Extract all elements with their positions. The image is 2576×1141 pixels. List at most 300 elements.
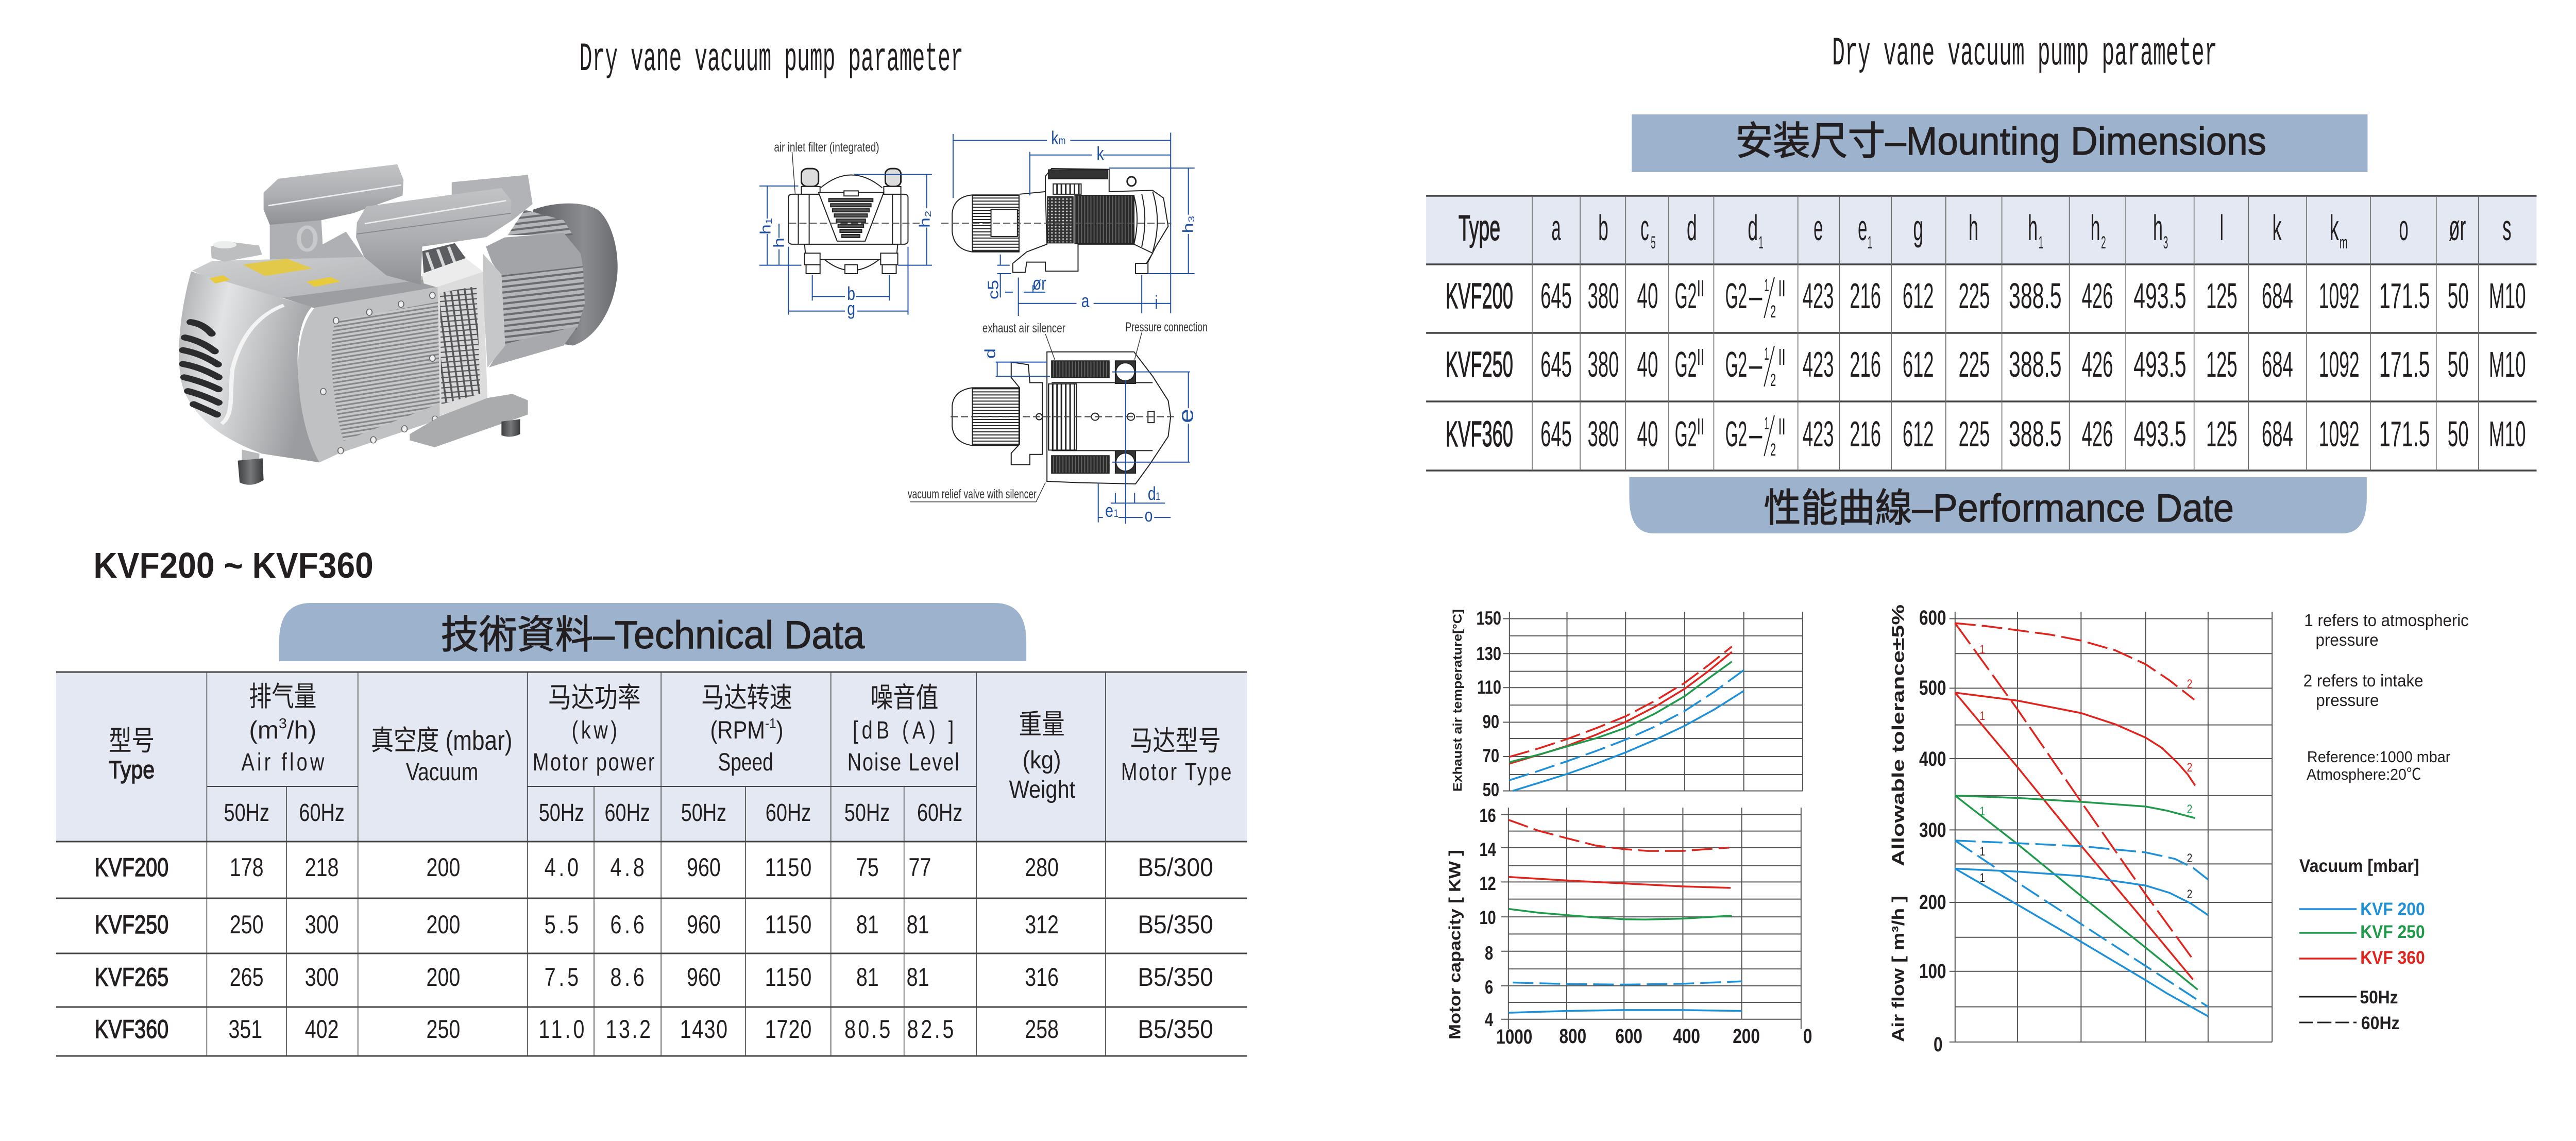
dimension letters: k xyxy=(1051,128,1059,148)
x axis values: 400 xyxy=(1673,1024,1700,1048)
row: KVF360: 388.5 xyxy=(2009,414,2062,455)
y axis values: 500 xyxy=(1919,676,1946,699)
table header text: Motor power xyxy=(533,749,655,776)
dimension drawing xyxy=(759,132,1195,524)
row: KVF250: 612 xyxy=(1903,345,1934,385)
table header text: Type xyxy=(1459,208,1500,248)
table header text: 噪音值 xyxy=(871,682,938,713)
legend: KVF 200: KVF 200 xyxy=(2360,899,2425,919)
row: KVF250: 216 xyxy=(1850,345,1881,385)
row: KVF360: G2 xyxy=(1725,414,1747,455)
row: KVF200: 426 xyxy=(2082,276,2113,316)
table header text: [dB (A) ] xyxy=(853,717,954,744)
row: KVF265: 81 xyxy=(907,962,929,992)
heading tab: technical data xyxy=(279,603,1026,661)
model range heading: KVF200 ~ KVF360 xyxy=(93,546,374,586)
row: KVF250: 6.6 xyxy=(611,910,645,939)
rear foot xyxy=(501,419,520,437)
dimension letters: m xyxy=(1059,135,1065,147)
row: KVF360: 40 xyxy=(1637,414,1658,455)
row: KVF360: – xyxy=(1749,414,1762,455)
row: KVF360: 2 xyxy=(1770,440,1776,460)
y axis values: 110 xyxy=(1477,677,1501,698)
dimension letters: h₂ xyxy=(917,210,933,228)
note 1: pressure xyxy=(2315,631,2379,650)
row: KVF360: 351 xyxy=(228,1014,262,1044)
bottom view xyxy=(952,352,1171,484)
row: KVF250: 50 xyxy=(2448,345,2469,385)
table header text: 60Hz xyxy=(766,799,811,827)
table header text: 马达转速 xyxy=(701,682,792,713)
heading: mounting dimensions xyxy=(1632,114,2367,172)
row: KVF250: 225 xyxy=(1959,345,1990,385)
row: KVF360: 684 xyxy=(2262,414,2293,455)
row: KVF360 xyxy=(95,1014,1213,1044)
y axis values xyxy=(1479,806,1496,1031)
curve numbers: 1 xyxy=(1980,804,1985,818)
row: KVF250: 2 xyxy=(1770,371,1776,390)
row: KVF200: 2 xyxy=(1770,302,1776,322)
vent slots xyxy=(183,322,218,414)
side panel xyxy=(298,287,440,462)
table header text: 1 xyxy=(2039,233,2043,253)
row: KVF200: 684 xyxy=(2262,276,2293,316)
row: KVF250: KVF250 xyxy=(95,910,168,939)
row: KVF360: 11.0 xyxy=(538,1014,584,1044)
y axis values: 300 xyxy=(1919,818,1946,842)
legend title: Vacuum [mbar] xyxy=(2299,855,2419,876)
dimension letters: h₁ xyxy=(757,218,773,234)
dimension letters: e xyxy=(1105,500,1113,521)
row: KVF200: 77 xyxy=(909,852,931,882)
table header text: h xyxy=(2091,208,2100,248)
title: left page: Dry vane vacuum pump parameter xyxy=(580,38,963,82)
table header text: 3 xyxy=(279,716,287,732)
row: KVF250: 81 xyxy=(907,910,929,939)
x axis values: 600 xyxy=(1615,1024,1642,1048)
dimension letters: k xyxy=(1097,143,1104,164)
row: KVF265: 8.6 xyxy=(611,962,645,992)
row: KVF360: 225 xyxy=(1959,414,1990,455)
row: KVF250: 1 xyxy=(1764,344,1769,364)
table header text: o xyxy=(2399,208,2409,248)
table header text: c xyxy=(1640,208,1649,248)
row: KVF360: 250 xyxy=(427,1014,460,1044)
table header text: Weight xyxy=(1009,776,1075,803)
motor ribbed body xyxy=(501,266,585,346)
row: KVF200: 50 xyxy=(2448,276,2469,316)
row: KVF200: 380 xyxy=(1588,276,1619,316)
row: KVF360: KVF360 xyxy=(1446,414,1513,455)
row: KVF360: 612 xyxy=(1903,414,1934,455)
row: KVF265: 265 xyxy=(230,962,264,992)
chart: motor capacity xyxy=(1445,806,1812,1048)
row: KVF250: 1150 xyxy=(765,910,811,939)
x axis values: 1000 xyxy=(1496,1025,1532,1048)
y axis values xyxy=(1476,608,1501,801)
curve numbers: 1 xyxy=(1980,870,1985,885)
table header text: 50Hz xyxy=(681,799,726,827)
table header text: 5 xyxy=(1651,233,1656,253)
table header text: Speed xyxy=(718,749,773,776)
legend: 50Hz: 50Hz xyxy=(2360,987,2398,1008)
row: KVF360: 380 xyxy=(1588,414,1619,455)
dimension letters: o xyxy=(1145,505,1153,526)
y axis values xyxy=(1919,606,1946,1056)
row: KVF265: KVF265 xyxy=(95,962,168,992)
row: KVF200: 1 xyxy=(1764,276,1769,295)
row: KVF265: 960 xyxy=(687,962,721,992)
heading tab: performance xyxy=(1629,477,2367,533)
row: KVF360: 50 xyxy=(2448,414,2469,455)
table header text: e xyxy=(1858,208,1867,248)
curve numbers: 2 xyxy=(2187,887,2192,901)
row: KVF200: 1092 xyxy=(2319,276,2360,316)
row: KVF265: 300 xyxy=(305,962,338,992)
row: KVF200 xyxy=(95,852,1213,882)
table header text: h xyxy=(1969,208,1978,248)
curve numbers: 1 xyxy=(1980,642,1985,657)
y axis values: 6 xyxy=(1485,977,1493,998)
table header text: 重量 xyxy=(1019,709,1065,740)
row: KVF360: G2 xyxy=(1675,414,1697,455)
row: KVF265: 200 xyxy=(427,962,460,992)
y axis values: 8 xyxy=(1485,943,1493,964)
table header text: s xyxy=(2502,208,2512,248)
label: exhaust air silencer: exhaust air silencer xyxy=(982,321,1065,335)
row: KVF360: 258 xyxy=(1025,1014,1059,1044)
table header text: -1 xyxy=(765,716,776,732)
row: KVF250: 250 xyxy=(230,910,264,939)
table header text: Noise Level xyxy=(848,749,959,776)
y axis title: tolerance: Allowable tolerance±5% xyxy=(1889,605,1908,866)
front cooling bar xyxy=(356,188,512,284)
table header text: 60Hz xyxy=(604,799,650,827)
row: KVF360: M10 xyxy=(2489,414,2526,455)
table header text: 马达功率 xyxy=(548,682,641,713)
dimension lines xyxy=(759,132,1195,524)
chart: exhaust air temperature xyxy=(1451,608,1803,801)
y axis title: air flow: Air flow [ m³/h ] xyxy=(1889,896,1908,1042)
curves xyxy=(1955,623,2208,1016)
row: KVF360: 402 xyxy=(305,1014,338,1044)
photo: vacuum pump xyxy=(179,164,618,485)
row: KVF265: 81 xyxy=(856,962,879,992)
row: KVF200: G2 xyxy=(1675,276,1697,316)
row: KVF200: 225 xyxy=(1959,276,1990,316)
curve numbers: 1 xyxy=(1980,709,1985,723)
motor top fins xyxy=(507,210,573,235)
motor terminal base xyxy=(486,233,583,277)
title: right page: Dry vane vacuum pump parameter xyxy=(1832,32,2217,77)
row: KVF250: G2 xyxy=(1675,345,1697,385)
y axis values: 200 xyxy=(1919,890,1946,914)
grid xyxy=(1950,612,2272,1042)
row: KVF250: 645 xyxy=(1540,345,1572,385)
table header text: k xyxy=(2330,208,2339,248)
curves xyxy=(1510,646,1744,791)
dimension letters: a xyxy=(1081,291,1090,311)
inlet fitting xyxy=(211,242,262,262)
row: KVF200: 40 xyxy=(1637,276,1658,316)
row: KVF200: 200 xyxy=(427,852,460,882)
row: KVF250: 125 xyxy=(2206,345,2238,385)
row: KVF200: 218 xyxy=(305,852,338,882)
dimension letters: h xyxy=(771,238,787,248)
row: KVF360: 1430 xyxy=(680,1014,727,1044)
table header text: a xyxy=(1551,208,1561,248)
row: KVF200: 612 xyxy=(1903,276,1934,316)
row: KVF200: 216 xyxy=(1850,276,1881,316)
table header text: 60Hz xyxy=(299,799,345,827)
row: KVF250: 1092 xyxy=(2319,345,2360,385)
row: KVF360: 423 xyxy=(1803,414,1834,455)
drawing labels xyxy=(757,128,1208,526)
row: KVF200: 388.5 xyxy=(2009,276,2062,316)
motor lower base xyxy=(489,326,578,367)
dimension letters: 1 xyxy=(1156,491,1160,503)
dimension letters: h₃ xyxy=(1180,215,1196,233)
y axis values: 4 xyxy=(1485,1010,1494,1031)
legend: KVF 360: KVF 360 xyxy=(2360,947,2425,968)
rear bar post xyxy=(270,217,365,265)
cooling fins xyxy=(422,243,466,273)
curve numbers: 2 xyxy=(2187,760,2192,775)
row: KVF200: KVF200 xyxy=(95,852,168,882)
row: KVF200: 645 xyxy=(1540,276,1572,316)
curve numbers xyxy=(1980,642,2192,901)
row: KVF360: B5/350 xyxy=(1138,1014,1213,1044)
row: KVF200: G2 xyxy=(1725,276,1747,316)
row: KVF250: 380 xyxy=(1588,345,1619,385)
panel top xyxy=(422,258,483,288)
row: KVF200: B5/300 xyxy=(1138,852,1213,882)
row: KVF360: 125 xyxy=(2206,414,2238,455)
x axis values xyxy=(1496,1024,1812,1048)
row: KVF360: 216 xyxy=(1850,414,1881,455)
row: KVF360: 1720 xyxy=(765,1014,811,1044)
table header text: k xyxy=(2272,208,2282,248)
table grid xyxy=(56,672,1247,1056)
table header text: 马达型号 xyxy=(1130,726,1221,757)
top plate edge xyxy=(282,279,438,308)
table header text: 3 xyxy=(2163,233,2168,253)
table header text: d xyxy=(1748,208,1758,248)
y axis values: 50 xyxy=(1483,780,1499,801)
reference conditions: Atmosphere:20℃ xyxy=(2307,765,2421,783)
terminal box behind xyxy=(452,175,533,238)
motor fan cover xyxy=(533,204,618,346)
row: KVF250: – xyxy=(1749,345,1762,385)
row: KVF250: G2 xyxy=(1725,345,1747,385)
row: KVF250: 426 xyxy=(2082,345,2113,385)
row: KVF265: 7.5 xyxy=(545,962,579,992)
table header text xyxy=(109,681,1231,827)
legend xyxy=(2299,855,2425,1033)
y axis values: 16 xyxy=(1479,806,1496,827)
y axis values: 150 xyxy=(1476,608,1501,629)
row: KVF360: 426 xyxy=(2082,414,2113,455)
table header text: l xyxy=(2220,208,2224,248)
row: KVF200: 171.5 xyxy=(2379,276,2430,316)
row: KVF360: 493.5 xyxy=(2133,414,2187,455)
table header text: h xyxy=(2028,208,2038,248)
legend: 60Hz: 60Hz xyxy=(2361,1013,2400,1033)
row: KVF250 xyxy=(1446,344,2526,390)
row: KVF265: 316 xyxy=(1025,962,1059,992)
row: KVF200: 4.0 xyxy=(545,852,579,882)
y axis values: 400 xyxy=(1919,747,1946,770)
row: KVF200 xyxy=(1446,276,2526,322)
curve numbers: 2 xyxy=(2187,851,2192,865)
top plate xyxy=(192,257,430,307)
table header text xyxy=(1459,208,2512,253)
row: KVF200: 423 xyxy=(1803,276,1834,316)
y axis title: Exhaust air temperature[°C] xyxy=(1451,609,1464,792)
table: technical data xyxy=(56,672,1247,1056)
row: KVF250: 312 xyxy=(1025,910,1059,939)
motor flange ring xyxy=(483,254,505,367)
chart: air flow xyxy=(1889,605,2272,1056)
row: KVF200: KVF200 xyxy=(1446,276,1513,316)
row: KVF200: 75 xyxy=(856,852,879,882)
heading tab: technical data: 技術資料–Technical Data xyxy=(441,613,865,657)
row: KVF250: 960 xyxy=(687,910,721,939)
note 1: 1 refers to atmospheric xyxy=(2304,611,2469,630)
dimension letters: d xyxy=(1148,483,1156,504)
row: KVF200: 960 xyxy=(687,852,721,882)
curve numbers: 2 xyxy=(2187,802,2192,816)
label: pressure connection: Pressure connection xyxy=(1126,320,1208,334)
dimension letters: g xyxy=(847,298,855,319)
x axis values: 0 xyxy=(1803,1024,1812,1048)
reference conditions: Reference:1000 mbar xyxy=(2307,748,2450,766)
table grid xyxy=(1426,196,2537,471)
table header text: 真空度 (mbar) xyxy=(371,725,512,756)
notes xyxy=(2303,611,2469,783)
row: KVF200: 125 xyxy=(2206,276,2238,316)
side view xyxy=(952,169,1168,274)
front foot xyxy=(242,449,260,462)
row: KVF265: B5/350 xyxy=(1138,962,1213,992)
grid xyxy=(1501,808,1801,1029)
table header text: e xyxy=(1814,208,1823,248)
row: KVF200: – xyxy=(1749,276,1762,316)
table header text: ) xyxy=(776,717,784,744)
table header text: (kw) xyxy=(572,717,617,744)
table header text: ør xyxy=(2449,208,2466,248)
grid xyxy=(1503,612,1803,791)
y axis values: 90 xyxy=(1483,712,1499,733)
table header text: b xyxy=(1598,208,1608,248)
row: KVF250: B5/350 xyxy=(1138,910,1213,939)
reference conditions xyxy=(2307,748,2450,783)
panel bolts xyxy=(320,292,438,454)
y axis values: 600 xyxy=(1919,606,1946,629)
note 2: pressure xyxy=(2316,691,2379,710)
row: KVF200: 178 xyxy=(230,852,264,882)
table header text: (RPM xyxy=(710,717,760,744)
y axis values: 130 xyxy=(1476,644,1501,665)
y axis values: 100 xyxy=(1919,959,1946,983)
table header text: 50Hz xyxy=(844,799,890,827)
row: KVF250 xyxy=(95,910,1213,939)
dimension letters xyxy=(757,128,1197,526)
table header text: (m xyxy=(249,717,272,744)
row: KVF360: 1 xyxy=(1764,414,1769,433)
row: KVF250: 200 xyxy=(427,910,460,939)
table header text: 2 xyxy=(2101,233,2106,253)
table header text: 50Hz xyxy=(539,799,584,827)
row: KVF200: M10 xyxy=(2489,276,2526,316)
table header text: h xyxy=(2153,208,2163,248)
x axis values: 800 xyxy=(1560,1024,1586,1048)
dimension letters: 1 xyxy=(1114,508,1118,520)
warning labels xyxy=(243,259,312,276)
y axis values: 12 xyxy=(1479,874,1496,895)
row: KVF360: 82.5 xyxy=(907,1014,954,1044)
dimension letters: d xyxy=(982,348,998,359)
row: KVF360: 1092 xyxy=(2319,414,2360,455)
row: KVF250: 81 xyxy=(856,910,879,939)
row: KVF250: 171.5 xyxy=(2379,345,2430,385)
label: vacuum relief valve: vacuum relief valve with silencer xyxy=(908,487,1037,501)
dimension letters: b xyxy=(847,283,855,304)
end cap xyxy=(179,272,319,462)
row: KVF360: 171.5 xyxy=(2379,414,2430,455)
row: KVF200: 1150 xyxy=(765,852,811,882)
note 1 xyxy=(2304,611,2469,650)
heading tab: performance: 性能曲線–Performance Date xyxy=(1764,486,2234,530)
row: KVF360 xyxy=(1446,414,2526,460)
row: KVF250: KVF250 xyxy=(1446,345,1513,385)
row: KVF250: 493.5 xyxy=(2133,345,2187,385)
y axis title: Motor capacity [ KW ] xyxy=(1445,850,1464,1039)
table header text: d xyxy=(1687,208,1697,248)
row: KVF250: 388.5 xyxy=(2009,345,2062,385)
row: KVF360: 645 xyxy=(1540,414,1572,455)
table header text: Air flow xyxy=(241,749,325,776)
eye bolt xyxy=(299,227,315,250)
table header text: g xyxy=(1913,208,1923,248)
row: KVF200: 493.5 xyxy=(2133,276,2187,316)
y axis values: 70 xyxy=(1483,746,1499,767)
row: KVF360: KVF360 xyxy=(95,1014,168,1044)
base foot xyxy=(410,394,528,447)
row: KVF250: 5.5 xyxy=(545,910,579,939)
row: KVF265: 1150 xyxy=(765,962,811,992)
row: KVF250: 40 xyxy=(1637,345,1658,385)
legend: KVF 250: KVF 250 xyxy=(2360,921,2425,942)
curve numbers: 1 xyxy=(1980,844,1985,859)
table header text: 50Hz xyxy=(224,799,269,827)
dimension letters: ør xyxy=(1032,273,1046,294)
label: air inlet filter: air inlet filter (integrated) xyxy=(774,140,879,155)
dimension letters: i xyxy=(1155,292,1158,313)
table header text: 排气量 xyxy=(249,681,316,712)
x axis values: 200 xyxy=(1733,1024,1760,1048)
row: KVF265 xyxy=(95,962,1213,992)
table header text: 1 xyxy=(1868,233,1872,253)
curve numbers: 2 xyxy=(2187,677,2192,691)
table header text: Vacuum xyxy=(406,759,478,786)
y axis values: 14 xyxy=(1479,840,1496,861)
table header text: 60Hz xyxy=(917,799,962,827)
table header text: Motor Type xyxy=(1121,759,1231,786)
heading: mounting dimensions: 安装尺寸–Mounting Dimensions xyxy=(1735,119,2266,163)
table header text: Type xyxy=(109,757,155,784)
front view xyxy=(788,169,908,274)
